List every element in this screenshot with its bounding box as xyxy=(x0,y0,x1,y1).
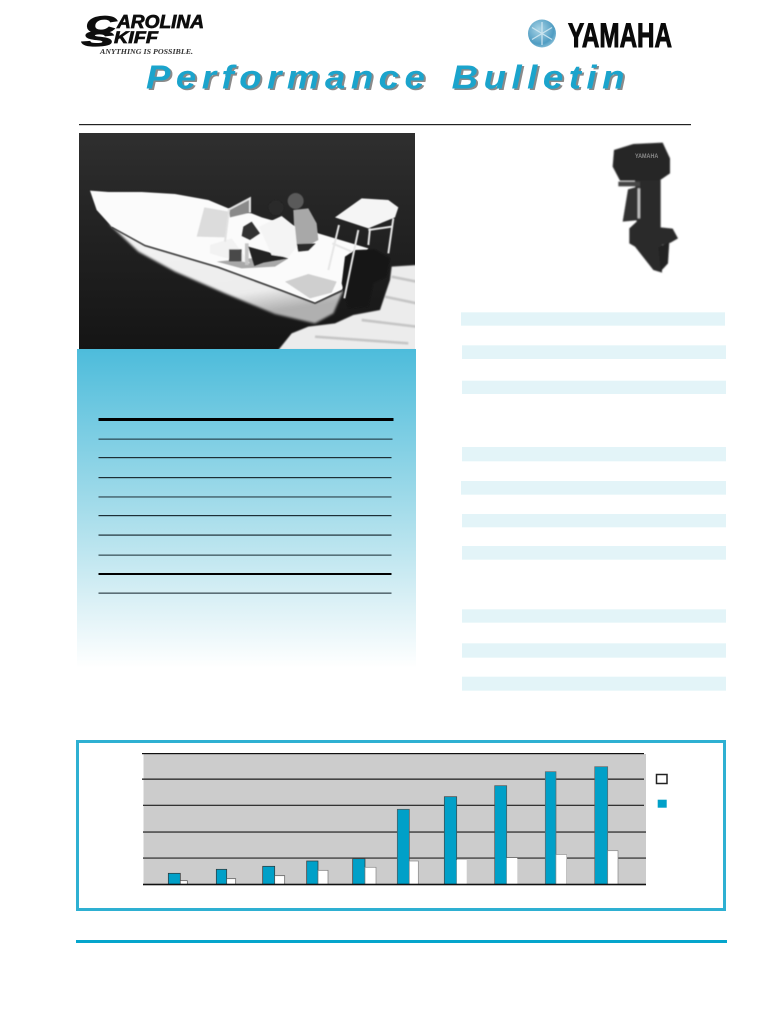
people xyxy=(248,193,318,266)
logo: Carolina Skiff: ANYTHING IS POSSIBLE. xyxy=(99,47,193,56)
bar pair 10 xyxy=(595,767,618,884)
console xyxy=(197,198,260,265)
outboard motor xyxy=(340,248,390,293)
table rules xyxy=(98,418,394,594)
legend swatch: blue series xyxy=(658,800,667,808)
title: Performance Bulletin xyxy=(148,60,632,97)
bar pair 6 xyxy=(397,809,418,884)
wordmark: YAMAHA xyxy=(568,17,672,55)
wake xyxy=(278,265,418,350)
legend xyxy=(656,774,667,808)
logo: Carolina Skiff: AROLINA xyxy=(116,12,204,32)
bar pair 7 xyxy=(444,797,467,884)
legend swatch: white series xyxy=(656,774,667,784)
logo: Carolina Skiff: C xyxy=(86,12,117,39)
bar pair 5 xyxy=(353,859,376,884)
bar chart xyxy=(142,753,646,885)
hull xyxy=(108,223,343,323)
bar pair 2 xyxy=(216,869,236,884)
chart panel frame xyxy=(78,742,724,910)
bar pair 8 xyxy=(495,786,517,884)
deck shadow xyxy=(285,274,337,298)
bar pair 4 xyxy=(307,861,328,884)
photo: Yamaha outboard motor: YAMAHA xyxy=(635,153,658,160)
title: Performance Bulletin xyxy=(146,58,630,96)
bar pair 9 xyxy=(545,772,567,884)
logo: Carolina Skiff: S xyxy=(82,28,113,51)
photo: Yamaha outboard motor xyxy=(613,143,678,273)
logo: Yamaha xyxy=(528,17,672,55)
deck xyxy=(90,191,368,303)
bar pair 1 xyxy=(168,873,187,884)
T-top xyxy=(328,198,398,298)
bar pair 3 xyxy=(263,866,285,884)
icon: Yamaha tuning fork emblem xyxy=(528,20,556,48)
photo: skiff underway with two people and outboard xyxy=(79,133,418,350)
specification bands xyxy=(461,312,726,691)
logo: Carolina Skiff xyxy=(82,12,204,56)
gradient specifications panel xyxy=(77,349,416,668)
logo: Carolina Skiff: KIFF xyxy=(114,28,159,47)
